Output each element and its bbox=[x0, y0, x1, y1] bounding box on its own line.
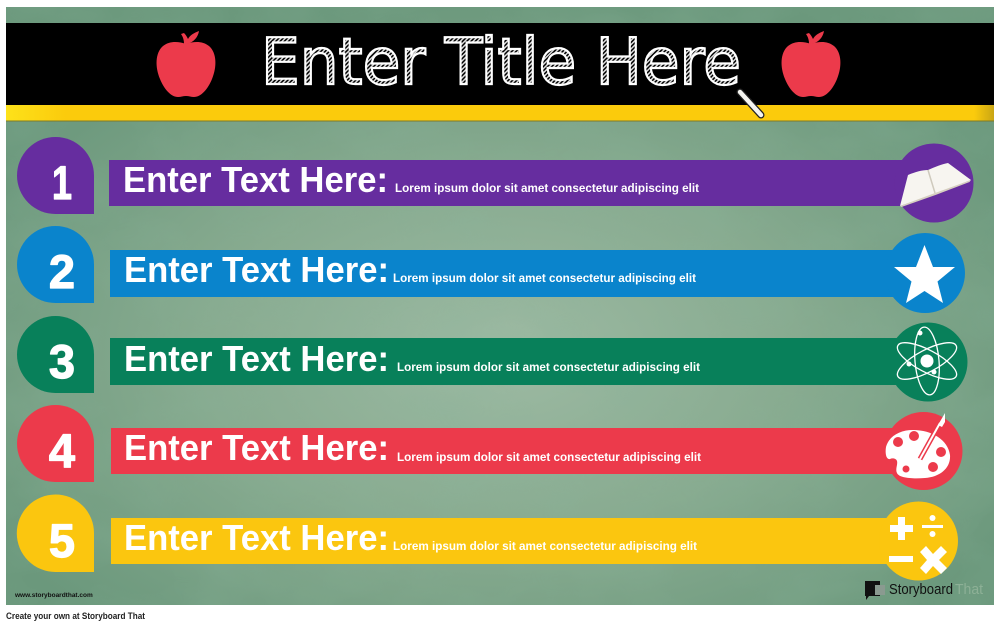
row 3 bbox=[17, 316, 968, 402]
row 4 bbox=[17, 405, 963, 490]
heading 4: Enter Text Here: bbox=[124, 427, 389, 468]
title: Enter Title Here bbox=[261, 26, 741, 100]
number badge 1 bbox=[17, 137, 94, 214]
bar 2 bbox=[110, 250, 910, 297]
icon: chalk stick bbox=[740, 92, 761, 115]
storyboard that logo: That bbox=[955, 582, 983, 598]
text 2: Lorem ipsum dolor sit amet consectetur adipiscing elit bbox=[393, 271, 696, 285]
caption: Create your own at Storyboard That bbox=[6, 611, 146, 622]
heading 1: Enter Text Here: bbox=[123, 159, 388, 200]
number badge 5: 5 bbox=[49, 514, 75, 567]
storyboard that logo bbox=[865, 581, 983, 600]
heading 3: Enter Text Here: bbox=[124, 338, 389, 379]
number badge 3 bbox=[17, 316, 94, 393]
icon: math symbols bbox=[879, 502, 958, 580]
storyboard that logo: Storyboard bbox=[889, 582, 953, 598]
text 3: Lorem ipsum dolor sit amet consectetur adipiscing elit bbox=[397, 360, 700, 374]
number badge 5 bbox=[17, 494, 94, 572]
number badge 3: 3 bbox=[49, 335, 75, 388]
icon: left apple bbox=[157, 31, 215, 97]
title banner bbox=[6, 23, 994, 122]
text 5: Lorem ipsum dolor sit amet consectetur adipiscing elit bbox=[393, 539, 697, 553]
icon: paint palette bbox=[884, 412, 962, 490]
icon: book bbox=[894, 144, 974, 222]
icon: star bbox=[885, 233, 965, 313]
number badge 1: 1 bbox=[52, 156, 72, 209]
row 2 bbox=[17, 226, 965, 313]
website credit: www.storyboardthat.com bbox=[14, 592, 93, 599]
heading 5: Enter Text Here: bbox=[124, 517, 389, 558]
row 1 bbox=[17, 137, 974, 222]
heading 2: Enter Text Here: bbox=[124, 249, 389, 290]
icon: right apple bbox=[782, 31, 840, 97]
bar 5 bbox=[111, 518, 911, 564]
text 1: Lorem ipsum dolor sit amet consectetur adipiscing elit bbox=[395, 181, 699, 195]
number badge 4 bbox=[17, 405, 94, 482]
bar 4 bbox=[111, 428, 911, 474]
icon: atom bbox=[888, 322, 968, 402]
bar 1 bbox=[109, 160, 909, 206]
text 4: Lorem ipsum dolor sit amet consectetur adipiscing elit bbox=[397, 450, 701, 464]
bar 3 bbox=[110, 338, 910, 385]
number badge 4: 4 bbox=[49, 424, 75, 477]
row 5 bbox=[17, 494, 958, 580]
number badge 2 bbox=[17, 226, 94, 303]
number badge 2: 2 bbox=[49, 245, 75, 298]
